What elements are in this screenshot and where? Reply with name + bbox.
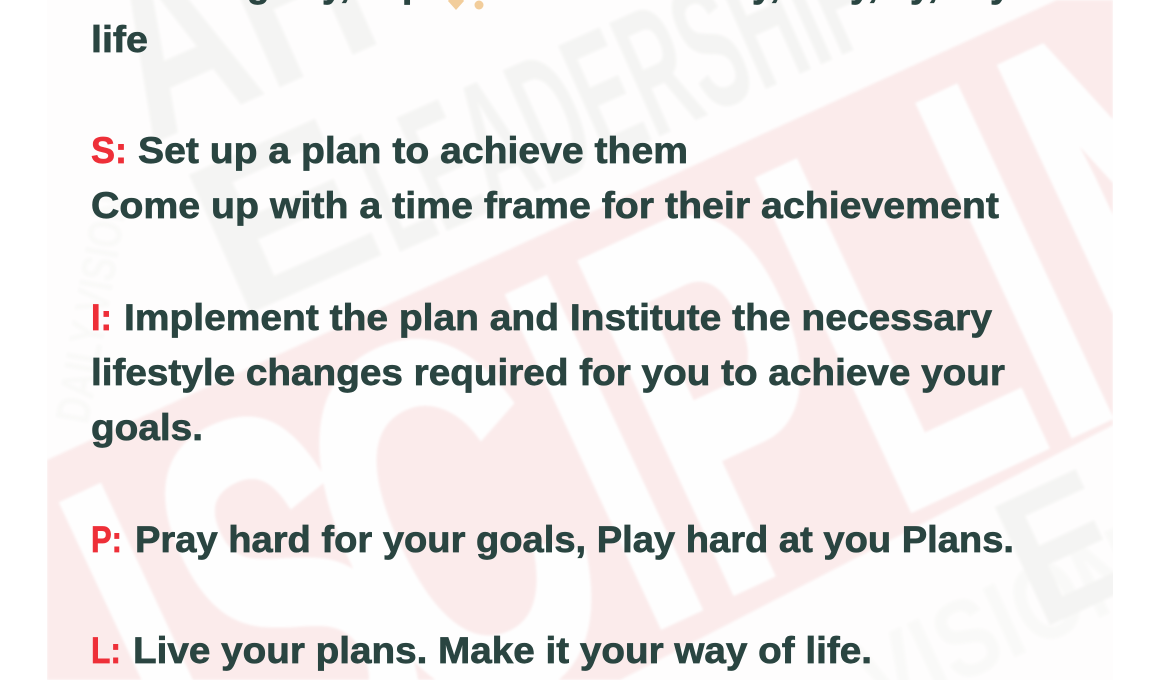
block S: Come up with a time frame for their achievement (91, 185, 999, 226)
block I: I: (91, 297, 112, 338)
clipped top line of text (247, 0, 1011, 10)
block S: S: (91, 130, 127, 171)
block I: Implement the plan and Institute the necessary (124, 297, 992, 338)
grey large letter E: E (154, 69, 409, 363)
block I: goals. (91, 407, 203, 448)
block L: L: (91, 630, 121, 671)
text: life: life (91, 19, 148, 60)
block S: Set up a plan to achieve them (138, 130, 688, 171)
block S (91, 130, 999, 226)
block P: Pray hard for your goals, Play hard at you Plans. (135, 519, 1014, 560)
block P: P: (91, 519, 122, 560)
knocked-out word DISCIPLINE: L (693, 11, 1101, 617)
icon: sparkle (448, 0, 484, 10)
block I: lifestyle changes required for you to achieve your (91, 352, 1005, 393)
block L: Live your plans. Make it your way of life. (133, 630, 872, 671)
grey word left edge: DAILY VISION (47, 191, 139, 427)
block I (91, 297, 1005, 448)
